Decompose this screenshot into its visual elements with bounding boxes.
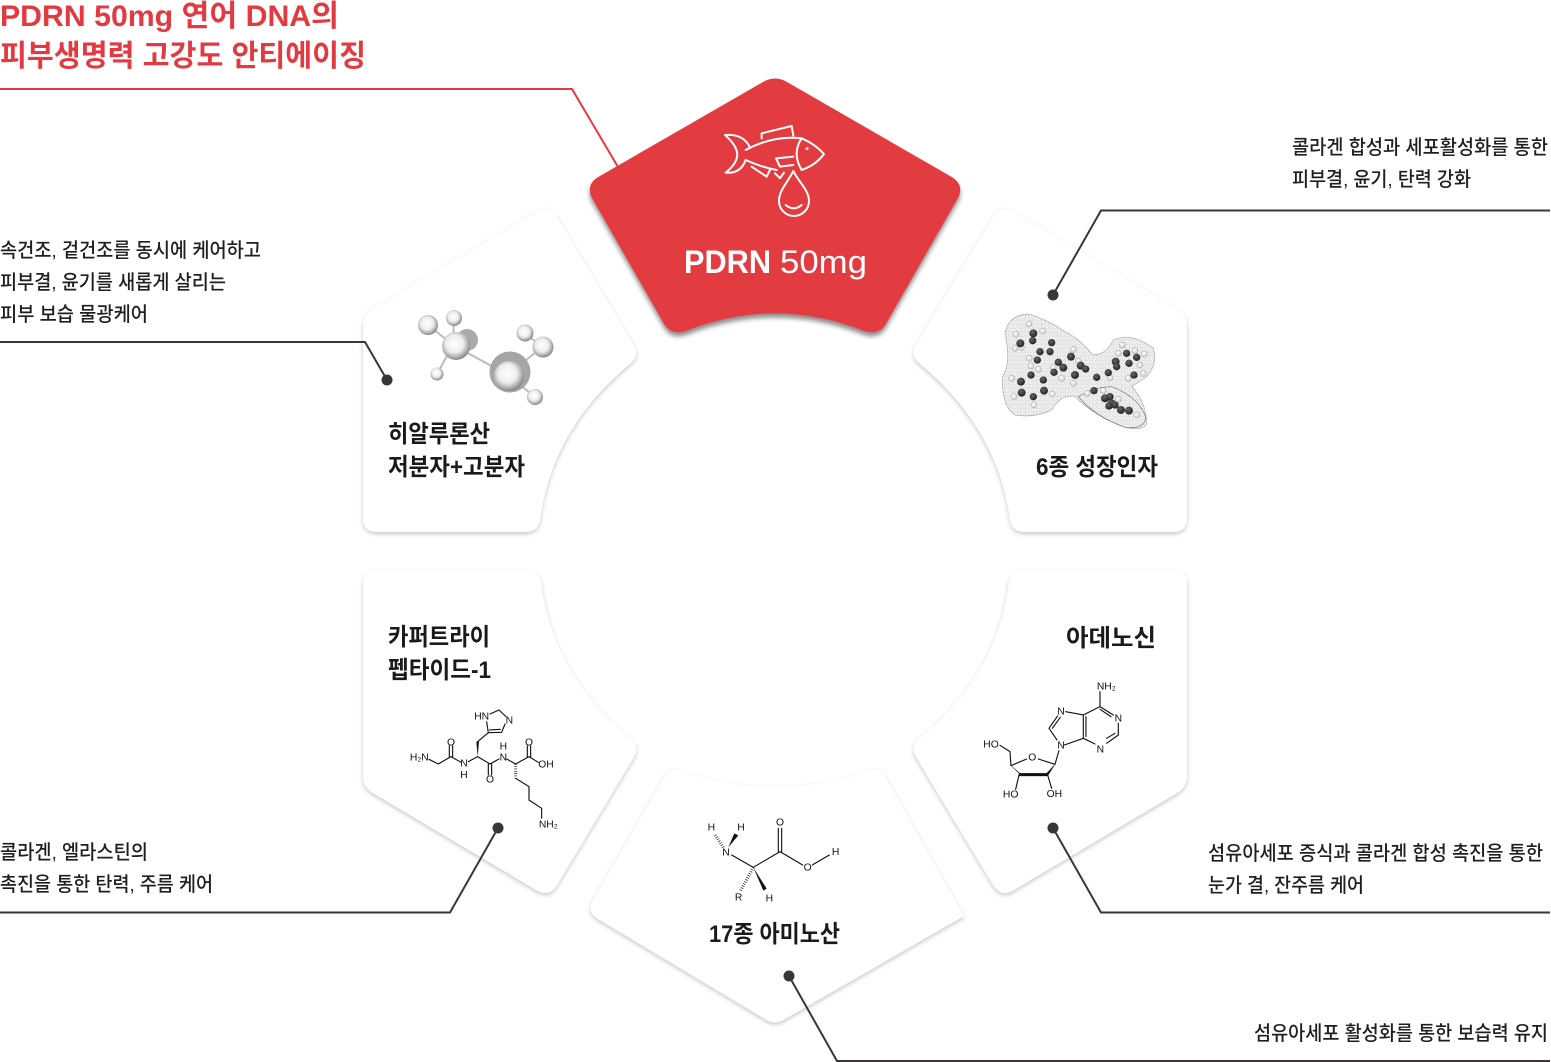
icon: adenosine structure: N xyxy=(1115,713,1122,724)
heading: copper tripeptide: 펩타이드-1 xyxy=(388,657,491,684)
label: PDRN 50mg: PDRN xyxy=(684,244,771,280)
icon: peptide structure: N xyxy=(500,752,507,763)
title: 피부생명력 고강도 안티에이징 xyxy=(0,40,366,73)
icon: amino acid structure: O xyxy=(776,818,784,829)
icon: amino acid structure: H xyxy=(832,847,839,858)
text: hyaluronic acid description: 속건조, 겉건조를 동시에 케어하고 xyxy=(0,239,261,262)
leader: copper tripeptide xyxy=(0,822,504,912)
panel: growth factors xyxy=(914,209,1187,532)
panel: adenosine xyxy=(914,570,1187,893)
icon: amino acid structure: H xyxy=(737,823,745,834)
red leader line to PDRN xyxy=(0,89,618,167)
text: adenosine description: 눈가 결, 잔주름 케어 xyxy=(1208,874,1364,897)
leader: hyaluronic acid xyxy=(0,342,392,386)
icon: amino acid structure: N xyxy=(722,848,730,859)
icon: peptide structure: NH₂ xyxy=(539,820,558,831)
icon: peptide structure: O xyxy=(525,737,533,748)
text: copper tripeptide description: 촉진을 통한 탄력, 주름 케어 xyxy=(0,873,213,896)
icon: peptide structure: OH xyxy=(538,760,554,771)
icon: fish and drop xyxy=(725,126,824,216)
icon: peptide structure: HN xyxy=(474,711,489,722)
title xyxy=(0,0,366,73)
icon: hyaluronic molecule xyxy=(418,310,554,405)
icon: peptide structure: H xyxy=(460,770,468,781)
text: copper tripeptide description: 콜라겐, 엘라스틴의 xyxy=(0,841,148,864)
icon: peptide structure xyxy=(410,710,558,831)
text: copper tripeptide description xyxy=(0,841,213,896)
icon: peptide structure: N xyxy=(460,759,468,770)
heading: amino acids: 17종 아미노산 xyxy=(709,921,840,948)
icon: peptide structure: N xyxy=(506,716,513,727)
heading: hyaluronic acid: 히알루론산 xyxy=(388,421,490,448)
icon: peptide structure: O xyxy=(486,775,494,786)
icon: adenosine structure: HO xyxy=(983,739,999,750)
icon: adenosine structure: N xyxy=(1057,741,1065,752)
text: hyaluronic acid description xyxy=(0,239,261,326)
panel: copper tripeptide xyxy=(363,570,636,893)
icon: adenosine structure: N xyxy=(1097,745,1104,756)
icon: growth factor molecule xyxy=(1002,314,1155,429)
icon: peptide structure: O xyxy=(447,737,455,748)
heading: growth factors: 6종 성장인자 xyxy=(1036,454,1158,481)
panel: amino acids xyxy=(590,769,964,1022)
icon: amino acid structure xyxy=(708,818,839,905)
heading: hyaluronic acid: 저분자+고분자 xyxy=(388,454,525,481)
heading: adenosine: 아데노신 xyxy=(1066,625,1156,652)
heading: copper tripeptide xyxy=(388,624,491,684)
panel: hyaluronic acid xyxy=(363,209,636,532)
title: PDRN 50mg 연어 DNA의 xyxy=(0,0,339,33)
icon: amino acid structure: H xyxy=(708,823,715,834)
text: hyaluronic acid description: 피부결, 윤기를 새롭게 살리는 xyxy=(0,271,226,294)
leader: adenosine xyxy=(1048,822,1550,912)
icon: peptide structure: H₂N xyxy=(410,752,429,763)
icon: amino acid structure: O xyxy=(804,863,812,874)
leader: amino acids xyxy=(784,970,1550,1061)
icon: adenosine structure: N xyxy=(1057,706,1065,717)
heading: hyaluronic acid xyxy=(388,421,525,481)
text: hyaluronic acid description: 피부 보습 물광케어 xyxy=(0,303,148,326)
text: growth factors description: 피부결, 윤기, 탄력 강화 xyxy=(1292,168,1471,191)
leader: growth factors xyxy=(1048,210,1550,300)
icon: adenosine structure: HO xyxy=(1003,790,1018,801)
icon: peptide structure: H xyxy=(500,741,507,752)
icon: adenosine structure: OH xyxy=(1047,789,1062,800)
icon: adenosine structure xyxy=(983,681,1122,801)
label: PDRN 50mg: 50mg xyxy=(780,244,867,280)
icon: amino acid structure: R xyxy=(735,893,742,904)
panel: PDRN 50mg xyxy=(590,78,960,332)
text: adenosine description xyxy=(1208,842,1543,897)
text: growth factors description xyxy=(1292,136,1548,191)
icon: adenosine structure: NH₂ xyxy=(1097,681,1116,692)
heading: copper tripeptide: 카퍼트라이 xyxy=(388,624,490,651)
icon: amino acid structure: H xyxy=(766,894,773,905)
label: PDRN 50mg xyxy=(684,244,867,280)
icon: adenosine structure: O xyxy=(1028,752,1036,763)
